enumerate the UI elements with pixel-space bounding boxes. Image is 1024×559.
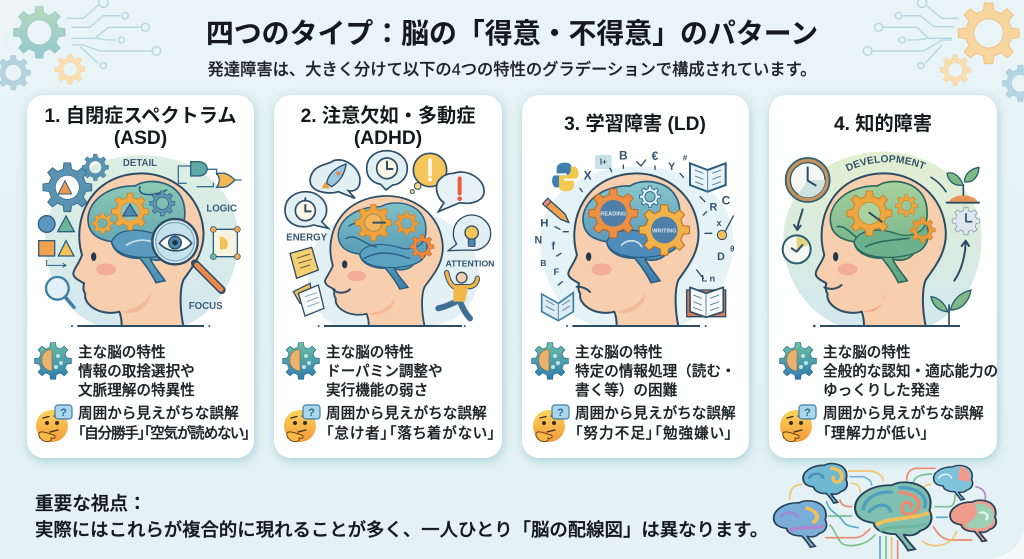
brain: upper right xyxy=(934,465,973,500)
text: main characteristics: 主な脳の特性 xyxy=(78,344,166,361)
text: main characteristics xyxy=(326,344,443,399)
icon: thinking face xyxy=(533,405,569,442)
label: ATTENTION: ATTENTION xyxy=(446,259,494,269)
callout: key perspective: 実際にはこれらが複合的に現れることが多く、一人ひとり「脳の配線図」は異なります。 xyxy=(35,519,768,540)
text: main characteristics: 主な脳の特性 xyxy=(326,344,414,361)
icon: clock bubble xyxy=(367,151,407,190)
scattered letters: N xyxy=(534,234,542,246)
heading: card 4: 4. 知的障害 xyxy=(834,113,932,135)
icon: wall clock xyxy=(786,158,830,202)
icon: rocket bubble xyxy=(310,160,360,198)
text: main characteristics: 情報の取捨選択や xyxy=(78,363,195,380)
label: DETAIL: DETAIL xyxy=(123,158,157,169)
scattered letters: C xyxy=(722,193,731,207)
scattered letters xyxy=(534,148,734,285)
decoration: top-right gears and circuit xyxy=(863,0,1024,101)
heading: card 3: 3. 学習障害 (LD) xyxy=(564,112,706,135)
scattered letters: x xyxy=(716,218,722,228)
title: 四つのタイプ：脳の「得意・不得意」のパターン xyxy=(206,18,818,49)
icon: brain gear xyxy=(532,343,568,379)
text: main characteristics xyxy=(575,344,736,399)
illustration: ASD brain xyxy=(38,154,242,327)
icon: logic gates xyxy=(178,162,242,187)
icon: top-right book xyxy=(690,163,726,192)
text: misconceptions: 「理解力が低い」 xyxy=(823,424,928,442)
icon: thinking face xyxy=(284,405,320,442)
text: misconceptions: 周囲から見えがちな誤解 xyxy=(575,404,736,422)
icon: thinking face xyxy=(36,405,72,442)
text: misconceptions: 周囲から見えがちな誤解 xyxy=(326,404,487,422)
subtitle: 発達障害は、大きく分けて以下の4つの特性のグラデーションで構成されています。 xyxy=(207,60,817,79)
icon: exclamation bubble xyxy=(437,172,484,212)
scattered letters: I+ xyxy=(600,158,607,167)
label: DEVELOPMENT: DEVELOPMENT xyxy=(845,155,926,172)
icon: brain gear xyxy=(780,343,816,379)
icon: sprout top xyxy=(947,167,979,203)
scattered letters: L n xyxy=(701,274,716,284)
icon: python logo xyxy=(552,163,579,191)
arrow: clock to small clock xyxy=(794,209,803,230)
panel: 1 autism spectrum xyxy=(27,95,254,458)
illustration: LD brain xyxy=(534,148,734,327)
text: misconceptions: 「努力不足」「勉強嫌い」 xyxy=(575,424,732,442)
heading: card 2: 2. 注意欠如・多動症 xyxy=(301,104,475,127)
icon: sprout bottom xyxy=(931,290,971,325)
icon: node frame xyxy=(210,226,240,260)
icon: thinking face xyxy=(780,405,816,442)
icon: bottom-right book xyxy=(687,287,726,317)
decoration: top-left gears and circuit xyxy=(0,0,161,90)
icon: writing gear: WRITING xyxy=(652,228,677,234)
text: misconceptions xyxy=(78,404,250,442)
brain: center xyxy=(855,482,931,551)
text: main characteristics: 全般的な認知・適応能力の xyxy=(823,362,998,380)
scattered letters: f xyxy=(552,240,556,252)
panel: 4 intellectual disability xyxy=(764,92,1004,466)
text: misconceptions: 「自分勝手」「空気が読めない」 xyxy=(78,424,250,442)
heading: card 2: (ADHD) xyxy=(354,128,422,149)
brain: lower right xyxy=(950,500,996,541)
text: main characteristics: 主な脳の特性 xyxy=(823,344,911,361)
icon: small magnifier xyxy=(46,277,74,307)
scattered letters: θ xyxy=(730,245,734,254)
callout: key perspective xyxy=(35,493,768,540)
illustration: brain wiring xyxy=(774,464,996,559)
text: misconceptions xyxy=(575,404,736,442)
text: main characteristics: 主な脳の特性 xyxy=(575,344,663,361)
scattered letters: H xyxy=(540,218,548,230)
callout: key perspective: 重要な視点： xyxy=(35,493,147,514)
scattered letters: € xyxy=(652,149,659,163)
icon: running person xyxy=(438,272,477,318)
scattered letters: D xyxy=(717,251,725,263)
label: LOGIC: LOGIC xyxy=(206,204,237,215)
text: main characteristics: ゆっくりした発達 xyxy=(823,382,940,399)
heading: card 1 xyxy=(44,105,237,149)
icon: reading gear xyxy=(589,189,638,238)
text: misconceptions: 「怠け者」「落ち着がない」 xyxy=(326,424,495,442)
illustration: intellectual brain xyxy=(782,152,982,328)
scattered letters: R xyxy=(709,202,717,214)
heading: card 1: 1. 自閉症スペクトラム xyxy=(44,105,237,127)
icon: brain gear xyxy=(283,343,319,379)
label: ENERGY: ENERGY xyxy=(286,233,328,244)
scattered letters: Y xyxy=(668,161,675,173)
brain: upper left xyxy=(803,464,847,503)
text: main characteristics: 書く等）の困難 xyxy=(575,381,678,399)
text: misconceptions xyxy=(326,404,495,442)
icon: lightbulb bubble xyxy=(448,215,491,251)
heading: card 1: (ASD) xyxy=(114,128,167,149)
scattered letters: B xyxy=(619,148,628,162)
illustration: ADHD brain xyxy=(285,151,494,327)
panel: 3 learning disability xyxy=(522,95,749,458)
text: main characteristics: 実行機能の弱さ xyxy=(326,382,428,399)
icon: sticky note xyxy=(290,247,318,278)
text: misconceptions: 周囲から見えがちな誤解 xyxy=(823,404,984,422)
icon: bottom-left book xyxy=(542,293,573,321)
icon: shapes xyxy=(38,216,74,267)
text: misconceptions xyxy=(823,404,984,442)
icon: small clock xyxy=(783,235,811,263)
label: FOCUS: FOCUS xyxy=(189,301,223,312)
panel: 2 ADHD xyxy=(274,95,502,458)
icon: writing gear xyxy=(639,205,689,255)
heading: card 2 xyxy=(301,104,475,149)
text: main characteristics xyxy=(78,344,195,399)
brain: lower left xyxy=(774,501,827,547)
scattered letters: F xyxy=(553,267,559,277)
arrow: up to gear clock xyxy=(954,241,969,281)
icon: small gear xyxy=(639,186,661,207)
text: main characteristics: ドーパミン調整や xyxy=(326,363,443,380)
scattered letters: # xyxy=(683,154,688,163)
text: main characteristics: 特定の情報処理（読む・ xyxy=(575,363,736,380)
scattered letters: X xyxy=(584,168,592,182)
icon: gear clock xyxy=(952,207,980,235)
icon: papers xyxy=(293,283,324,316)
text: main characteristics xyxy=(823,344,998,399)
icon: stopwatch bubble xyxy=(285,192,328,228)
wires xyxy=(790,468,985,559)
icon: pencil xyxy=(543,198,569,223)
icon: small gear xyxy=(82,154,109,181)
icon: brain gear xyxy=(35,343,71,379)
text: misconceptions: 周囲から見えがちな誤解 xyxy=(78,404,239,422)
text: main characteristics: 文脈理解の特異性 xyxy=(78,382,195,399)
icon: reading gear: READING xyxy=(600,212,627,218)
icon: large gear with triangle xyxy=(43,163,92,212)
icon: yellow exclamation xyxy=(410,153,447,194)
scattered letters: B xyxy=(540,258,546,268)
